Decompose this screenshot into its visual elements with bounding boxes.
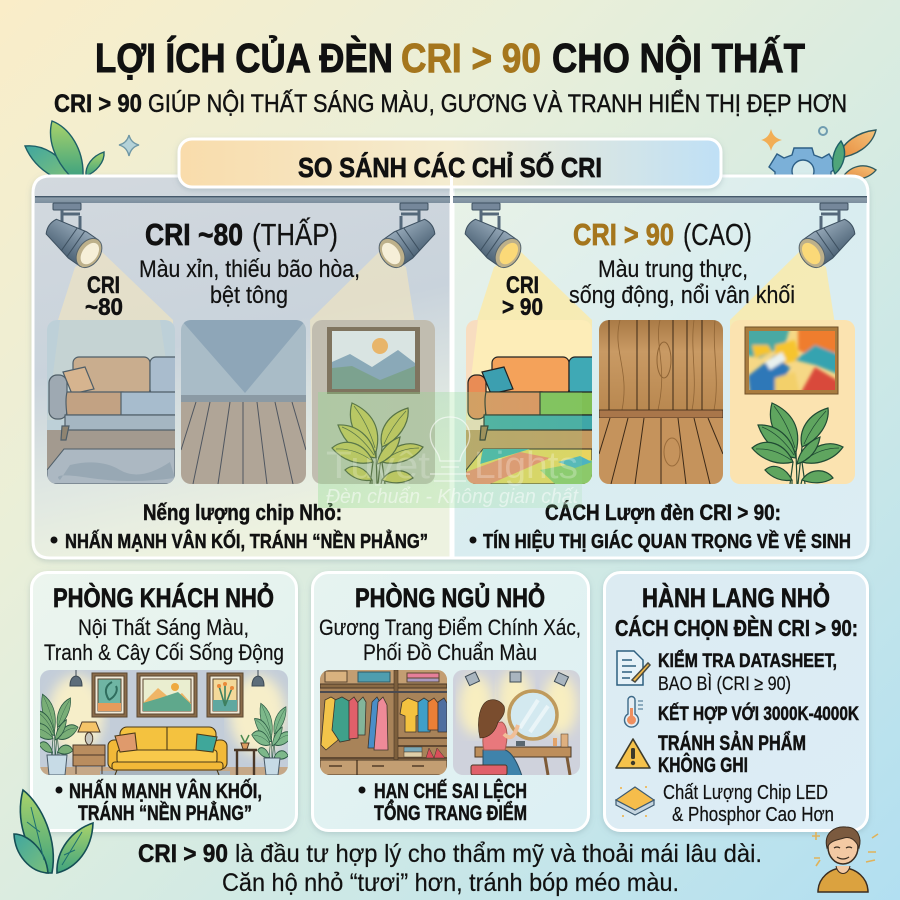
bullet: living room: TRÁNH “NỀN PHẲNG” (78, 802, 252, 825)
illustration: dull sofa (47, 320, 175, 484)
icon: document and pencil (617, 651, 650, 685)
text: chip quality: & Phosphor Cao Hơn (672, 804, 834, 826)
bullet: bedroom: TỔNG TRANG ĐIỂM (374, 801, 527, 825)
bullet: bedroom: HẠN CHẾ SAI LỆCH (374, 779, 527, 803)
text: color temperature: KẾT HỢP VỚI 3000K-4000K (658, 703, 859, 725)
heading CRI 90 (573, 217, 752, 252)
heading CRI 80: (THẤP) (252, 217, 338, 252)
heading CRI 90: CRI > 90 (573, 217, 674, 252)
text: datasheet: KIỂM TRA DATASHEET, (658, 650, 837, 672)
footer text: là đầu tư hợp lý cho thẩm mỹ và thoải mái lâu dài. (235, 840, 762, 868)
light beams right (466, 252, 850, 420)
illustration: vivid sofa (466, 320, 592, 484)
watermark (318, 392, 582, 508)
label CRI > 90: > 90 (502, 294, 543, 321)
icon: thermometer (624, 697, 643, 727)
footer text (138, 840, 762, 897)
light beams left (47, 252, 430, 420)
icon: relaxed person (812, 827, 878, 892)
subtitle: CRI > 90 (54, 90, 142, 118)
decoration: leaves top left (25, 121, 104, 176)
heading CRI 90: (CAO) (683, 217, 752, 252)
text: avoid unlabelled: KHÔNG GHI (658, 753, 748, 777)
description CRI 90: sống động, nổi vân khối (569, 282, 795, 309)
card description: living room: Tranh & Cây Cối Sống Động (44, 640, 284, 665)
illustration: living room (32, 670, 293, 775)
card heading: living room: PHÒNG KHÁCH NHỎ (53, 581, 274, 613)
card heading: bedroom: PHÒNG NGỦ NHỎ (355, 581, 545, 613)
decoration: gear and leaves top right (761, 127, 876, 182)
text: datasheet (658, 650, 837, 695)
track rail left (35, 196, 450, 203)
watermark: Tuyệt (326, 445, 430, 487)
title: CHO NỘI THẤT (552, 35, 805, 81)
text: avoid unlabelled: TRÁNH SẢN PHẨM (658, 732, 806, 755)
bullet: living room: NHẤN MẠNH VÂN KHỐI, (69, 779, 262, 803)
track rail right (453, 196, 867, 203)
icon: sparkle left (119, 135, 139, 156)
illustration: wood wall and floor (599, 320, 723, 484)
card: hallway (604, 572, 868, 830)
card description: bedroom: Gương Trang Điểm Chính Xác, (319, 615, 581, 640)
label CRI ~80: CRI (87, 272, 120, 299)
card: living room (32, 572, 296, 830)
card heading: hallway: HÀNH LANG NHỎ (642, 581, 830, 613)
watermark: Đèn chuẩn - Không gian chất (326, 486, 579, 508)
description CRI 80: Màu xỉn, thiếu bão hòa, (139, 256, 360, 283)
bullet: bedroom (358, 779, 527, 825)
heading CRI 80 (145, 217, 338, 252)
description CRI 90 (569, 256, 795, 309)
panel: comparison background (33, 176, 868, 558)
label CRI ~80 (85, 272, 123, 321)
icon: LED chip (616, 786, 654, 817)
card description: living room (44, 615, 284, 665)
text: avoid unlabelled (658, 732, 806, 777)
note CRI 90: CÁCH Lượn đèn CRI > 90: (545, 500, 781, 525)
heading CRI 80: CRI ~80 (145, 217, 243, 252)
icon: warning (616, 739, 650, 768)
label CRI > 90 (502, 272, 543, 321)
watermark: Lights (474, 445, 578, 487)
title: LỢI ÍCH CỦA ĐÈN (95, 35, 393, 81)
note CRI 80: Nếng lượng chip Nhỏ: (143, 500, 342, 525)
text: chip quality (663, 782, 834, 826)
title (95, 35, 805, 81)
footer text: Căn hộ nhỏ “tươi” hơn, tránh bóp méo màu. (222, 869, 679, 897)
illustration: wardrobe (320, 670, 447, 775)
description CRI 90: Màu trung thực, (598, 256, 748, 283)
panel: CRI 80 low (35, 196, 450, 553)
illustration: dull wall and floor (181, 320, 306, 484)
card description: bedroom (319, 615, 581, 665)
decoration: leaves bottom left (14, 790, 93, 873)
illustration: vanity mirror (453, 670, 580, 776)
title: CRI > 90 (401, 35, 541, 81)
illustration: dull painting and plant (312, 320, 435, 484)
text: chip quality: Chất Lượng Chip LED (663, 782, 828, 804)
divider between panels (450, 176, 453, 558)
card description: bedroom: Phối Đồ Chuẩn Màu (363, 640, 537, 665)
description CRI 80: bệt tông (210, 282, 288, 309)
label CRI ~80: ~80 (85, 294, 123, 321)
bullet: living room (56, 779, 262, 825)
card: bedroom (312, 572, 588, 830)
panel: CRI 90 high (453, 196, 867, 553)
track lights right (459, 203, 861, 272)
track lights left (40, 203, 441, 272)
text: datasheet: BAO BÌ (CRI ≥ 90) (658, 674, 791, 695)
footer text: CRI > 90 (138, 840, 228, 868)
description CRI 80 (139, 256, 360, 309)
card description: living room: Nội Thất Sáng Màu, (78, 615, 249, 640)
bullet CRI 80: NHẤN MẠNH VÂN KỐI, TRÁNH “NỀN PHẲNG” (65, 529, 428, 553)
section heading pill (179, 139, 721, 187)
section heading pill: SO SÁNH CÁC CHỈ SỐ CRI (298, 151, 602, 183)
label CRI > 90: CRI (506, 272, 539, 299)
illustration: vivid painting and plant (730, 320, 855, 484)
